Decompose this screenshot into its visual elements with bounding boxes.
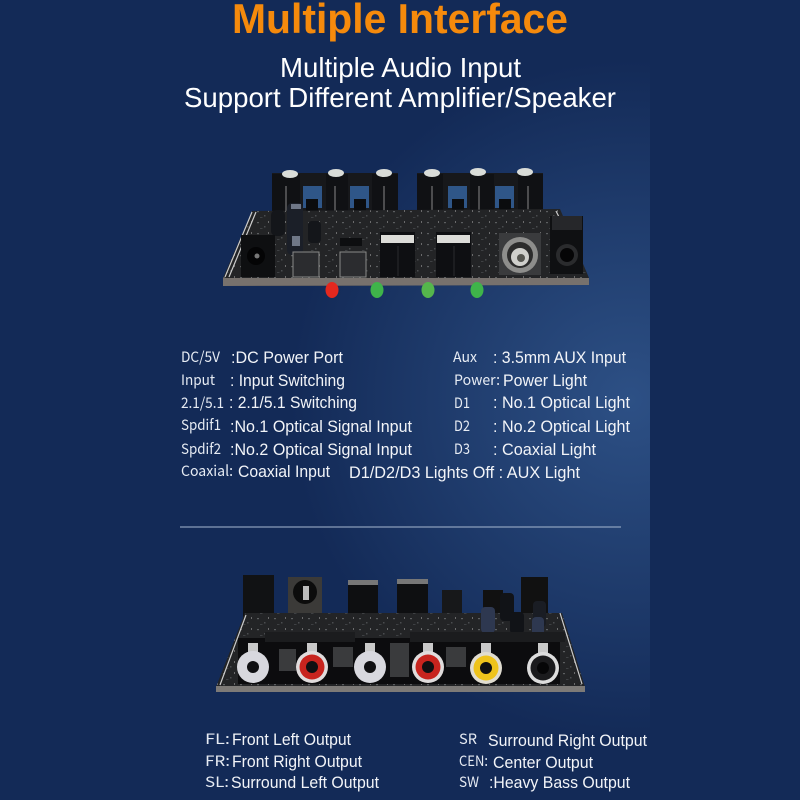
- capacitors: [271, 203, 321, 255]
- left legend: [181, 346, 412, 481]
- left legend: Input: [181, 369, 215, 390]
- bottom right legend: Surround Right Output: [488, 732, 647, 750]
- right legend: D3: [454, 438, 470, 459]
- yellow cen: [470, 652, 502, 684]
- right legend: Aux: [453, 346, 477, 367]
- rca jacks: [237, 643, 559, 684]
- bottom right legend: SR: [459, 728, 477, 749]
- right legend: : 3.5mm AUX Input: [493, 349, 626, 367]
- coaxial jack: [499, 233, 541, 275]
- rear connector rows: [272, 168, 543, 218]
- dc jacks: [241, 216, 583, 277]
- bottom circuit board photo: [216, 575, 585, 692]
- left legend: :DC Power Port: [231, 349, 343, 367]
- pcb: [216, 613, 585, 692]
- red fr: [296, 651, 328, 683]
- bottom right legend: :Heavy Bass Output: [489, 774, 630, 792]
- upper components: [243, 575, 548, 627]
- capacitors: [481, 593, 546, 637]
- left legend: Coaxial Input: [238, 463, 330, 481]
- leds: [326, 282, 484, 298]
- switches: [293, 238, 366, 277]
- bottom right legend: SW: [459, 771, 479, 792]
- right legend: D1/D2/D3 Lights Off : AUX Light: [349, 464, 580, 482]
- pcb: [223, 209, 589, 286]
- subtitle: Multiple Audio Input: [280, 52, 521, 83]
- left legend: :No.1 Optical Signal Input: [230, 418, 412, 436]
- bottom left legend: FR:: [205, 750, 230, 771]
- right legend: Power:: [454, 369, 500, 390]
- right legend: : No.2 Optical Light: [493, 418, 630, 436]
- bottom left legend: Surround Left Output: [231, 774, 379, 792]
- right legend: Power Light: [503, 372, 587, 390]
- right legend: D2: [454, 415, 470, 436]
- bottom left legend: Front Right Output: [232, 753, 362, 771]
- board details: [279, 643, 466, 677]
- bottom left legend: FL:: [205, 728, 230, 749]
- bottom left legend: [205, 728, 379, 792]
- left legend: : 2.1/5.1 Switching: [229, 394, 357, 412]
- left legend: Spdif2: [181, 438, 221, 459]
- white fl: [237, 651, 269, 683]
- left legend: DC/5V: [181, 346, 221, 367]
- red sr: [412, 651, 444, 683]
- left legend: : Input Switching: [230, 372, 345, 390]
- subtitle: Support Different Amplifier/Speaker: [184, 82, 616, 113]
- bottom left legend: SL:: [205, 771, 229, 792]
- bottom left legend: Front Left Output: [232, 731, 351, 749]
- right legend: [349, 346, 630, 482]
- left legend: 2.1/5.1: [181, 392, 224, 413]
- right legend: D1: [454, 392, 470, 413]
- optical ports: [380, 232, 471, 277]
- bottom right legend: [459, 728, 647, 792]
- left legend: Coaxial:: [181, 460, 233, 481]
- left legend: :No.2 Optical Signal Input: [230, 441, 412, 459]
- right legend: : Coaxial Light: [493, 441, 596, 459]
- top circuit board photo: [223, 168, 589, 298]
- connector housing: [238, 638, 560, 684]
- bottom right legend: Center Output: [493, 754, 593, 772]
- white sl: [354, 651, 386, 683]
- left legend: Spdif1: [181, 414, 221, 435]
- black sw: [527, 652, 559, 684]
- right legend: : No.1 Optical Light: [493, 394, 630, 412]
- subtitle: [184, 52, 616, 113]
- bottom right legend: CEN:: [459, 750, 488, 771]
